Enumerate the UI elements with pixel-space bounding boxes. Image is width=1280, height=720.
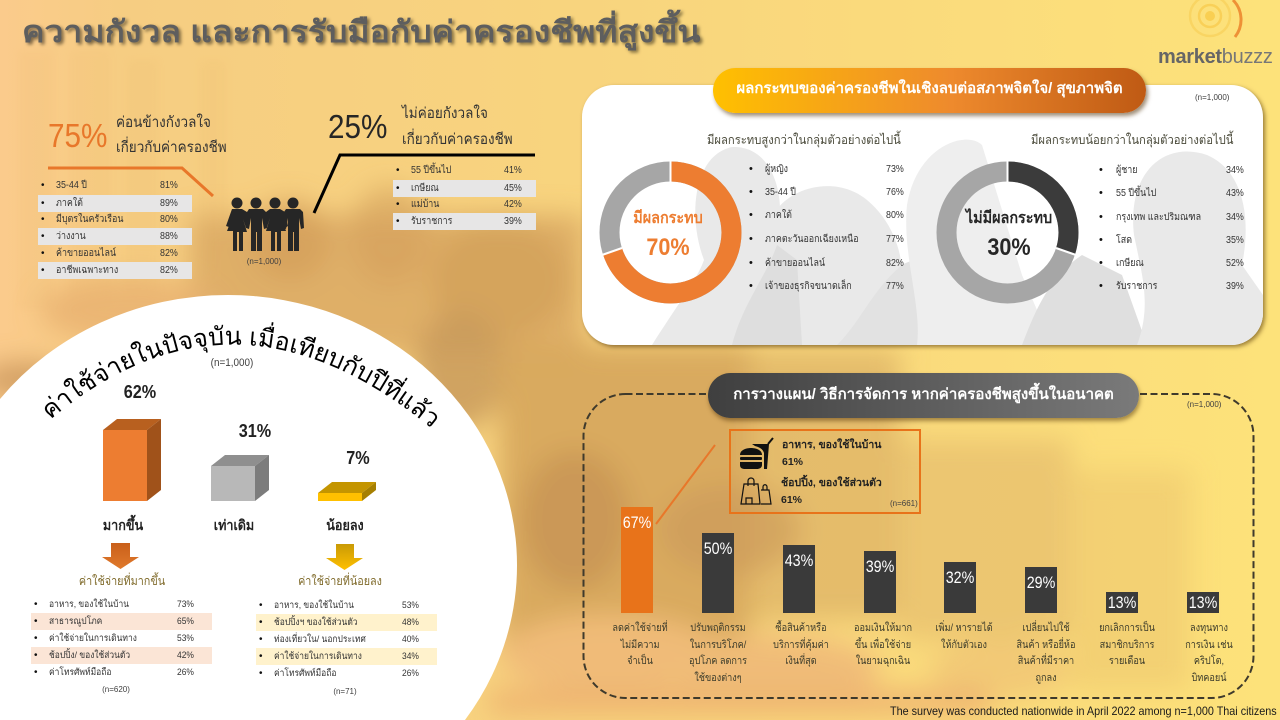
list: lower impact groups: 35% — [1226, 235, 1244, 246]
label: ลงทุนทาง — [1190, 622, 1228, 634]
list: spending down: ท่องเที่ยวใน/ นอกประเทศ — [274, 634, 366, 645]
concern stat: 75%: เกี่ยวกับค่าครองชีพ — [116, 139, 227, 156]
list: higher impact groups: • — [749, 186, 753, 198]
donut label: impacted — [633, 209, 703, 261]
list: not concerned groups: 41% — [504, 165, 522, 176]
list: concerned groups: • — [41, 180, 45, 191]
label: ให้กับตัวเอง — [941, 639, 987, 651]
list: spending up — [31, 598, 212, 678]
label — [1099, 620, 1155, 667]
list: spending up: อาหาร, ของใช้ในบ้าน — [49, 599, 129, 610]
list: higher impact groups: • — [749, 163, 753, 175]
label: บิทคอยน์ — [1191, 672, 1227, 684]
subhead: spending up: ค่าใช้จ่ายที่มากขึ้น — [79, 574, 165, 588]
list: spending down: • — [259, 651, 263, 662]
label — [689, 622, 747, 684]
bar: 43% — [783, 545, 815, 613]
label: ในยามฉุกเฉิน — [856, 655, 910, 667]
list: lower impact groups: • — [1099, 187, 1103, 199]
label: ลดค่าใช้จ่ายที่ — [612, 622, 668, 634]
panel: future coping dashed frame — [582, 393, 1254, 699]
icon: burger and drink — [740, 437, 774, 469]
donut label: impacted: มีผลกระทบ — [633, 210, 703, 227]
label: รายเดือน — [1109, 655, 1145, 667]
not concerned stat: 25% — [328, 104, 513, 148]
bar: 32%: 32% — [946, 568, 974, 587]
list: concerned groups: มีบุตรในครัวเรือน — [56, 214, 124, 225]
bar: 43%: 43% — [785, 551, 813, 570]
list: spending down: ค่าใช้จ่ายในการเดินทาง — [274, 651, 362, 662]
list: concerned groups: • — [41, 214, 45, 225]
header pill: future coping — [708, 373, 1139, 418]
bar: 29% — [1025, 567, 1057, 613]
connector: callout line — [655, 444, 716, 524]
label — [1017, 620, 1075, 684]
list: lower impact groups: 34% — [1226, 212, 1244, 223]
list: concerned groups: ว่างงาน — [56, 231, 86, 242]
label: ขึ้น เพื่อใช้จ่าย — [855, 639, 911, 651]
list: concerned groups: • — [41, 198, 45, 209]
list: spending up: 73% — [177, 599, 194, 610]
list: not concerned groups: • — [396, 199, 400, 210]
not concerned stat: 25%: เกี่ยวกับค่าครองชีพ — [402, 131, 513, 148]
list: higher impact groups: เจ้าของธุรกิจขนาดเล็ก — [765, 281, 852, 292]
list: higher impact groups: 35-44 ปี — [765, 187, 796, 198]
bar: 32% — [944, 562, 976, 613]
label: เพิ่ม/ หารายได้ — [935, 622, 993, 634]
list: not concerned groups: รับราชการ — [411, 216, 452, 227]
list: higher impact groups: ภาคใต้ — [765, 210, 792, 221]
label: คริปโต, — [1194, 655, 1224, 667]
bar: 67%: 67% — [623, 513, 651, 532]
connector: orange line — [48, 166, 214, 197]
sample size: (n=661) — [890, 499, 918, 508]
list: spending up: สาธารณูปโภค — [49, 616, 102, 627]
label: ใช้ของต่างๆ — [694, 672, 742, 684]
donut label: impacted: 70% — [646, 234, 690, 261]
concern stat: 75%: 75% — [48, 117, 107, 154]
text: food — [782, 438, 882, 468]
text: food: อาหาร, ของใช้ในบ้าน — [782, 439, 881, 451]
list: spending down: 40% — [402, 634, 419, 645]
list: not concerned groups: 42% — [504, 199, 522, 210]
sample size: (n=620) — [102, 685, 130, 694]
donut: not impacted 30% — [936, 162, 1078, 304]
list: lower impact groups: รับราชการ — [1116, 281, 1157, 292]
list: lower impact groups: กรุงเทพ และปริมณฑล — [1116, 212, 1201, 223]
value: 31%: 31% — [239, 421, 271, 441]
list: higher impact groups: ผู้หญิง — [765, 164, 788, 175]
list: not concerned groups: • — [396, 216, 400, 227]
list: concerned groups: • — [41, 248, 45, 259]
list: concerned groups: 82% — [160, 265, 178, 276]
logo: marketbuzzz: marketbuzzz — [1158, 46, 1273, 68]
bar: 13% invest: 13% — [1189, 593, 1217, 612]
concern stat: 75%: ค่อนข้างกังวลใจ — [116, 114, 211, 131]
list: not concerned groups: 39% — [504, 216, 522, 227]
label: more: มากขึ้น — [103, 517, 143, 533]
text: shopping: 61% — [781, 494, 802, 506]
sample size: (n=1,000) — [1195, 93, 1229, 102]
list: lower impact groups: • — [1099, 234, 1103, 246]
arrow: more — [102, 543, 139, 569]
footer: survey note: The survey was conducted nationwide in April 2022 among n=1,000 Thai citizens — [890, 704, 1277, 718]
silhouettes — [652, 140, 1263, 345]
list: spending down: 48% — [402, 617, 419, 628]
donut: impacted 70% — [600, 162, 742, 304]
list: not concerned groups — [393, 162, 536, 230]
value: 62%: 62% — [124, 382, 156, 402]
list: concerned groups: 81% — [160, 180, 178, 191]
label: ไม่มีความ — [620, 639, 660, 651]
header pill: future coping: การวางแผน/ วิธีการจัดการ หากค่าครองชีพสูงขึ้นในอนาคต — [733, 386, 1114, 403]
list: not concerned groups: 55 ปีขึ้นไป — [411, 165, 451, 176]
label — [935, 620, 993, 651]
list: lower impact groups: เกษียณ — [1116, 258, 1144, 269]
bar: 50% — [702, 533, 734, 613]
text: shopping: ช้อปปิ้ง, ของใช้ส่วนตัว — [781, 477, 882, 489]
list: spending down: ช้อปปิ้งฯ ของใช้ส่วนตัว — [274, 617, 358, 628]
list: spending up: • — [34, 633, 38, 644]
list: not concerned groups: • — [396, 165, 400, 176]
subhead: lower impact: มีผลกระทบน้อยกว่าในกลุ่มตัวอย่างต่อไปนี้ — [1031, 133, 1233, 147]
list: higher impact groups: • — [749, 209, 753, 221]
connector: black line — [312, 154, 535, 214]
sample size: (n=1,000) — [1187, 400, 1221, 409]
label: เปลี่ยนไปใช้ — [1022, 622, 1070, 634]
donut label: not impacted: ไม่มีผลกระทบ — [966, 210, 1052, 227]
list: lower impact groups: 43% — [1226, 188, 1244, 199]
list: higher impact groups: • — [749, 280, 753, 292]
label: สินค้า หรือยี่ห้อ — [1017, 639, 1075, 651]
list: spending up: 65% — [177, 616, 194, 627]
label — [773, 620, 829, 667]
label: ยกเลิกการเป็น — [1099, 622, 1155, 634]
title: ความกังวล และการรับมือกับค่าครองชีพที่สูงขึ้น — [22, 16, 700, 49]
list: spending up: ช้อปปิ้ง/ ของใช้ส่วนตัว — [49, 650, 130, 661]
list: lower impact groups: • — [1099, 164, 1103, 176]
list: concerned groups: อาชีพเฉพาะทาง — [56, 265, 118, 276]
text: food: 61% — [782, 456, 803, 468]
bar chart: coping plans — [612, 507, 1233, 684]
logo: marketbuzzz — [1158, 0, 1273, 68]
list: lower impact groups: 52% — [1226, 258, 1244, 269]
list: higher impact groups: • — [749, 233, 753, 245]
curved heading: spending vs last year: ค่าใช้จ่ายในปัจจุบัน เมื่อเทียบกับปีที่แล้ว — [44, 322, 438, 426]
text: shopping — [781, 474, 882, 506]
subhead: spending down: ค่าใช้จ่ายที่น้อยลง — [298, 574, 382, 588]
list: higher impact groups: 77% — [886, 234, 904, 245]
list: higher impact groups: 77% — [886, 281, 904, 292]
header pill: mental health impact — [713, 68, 1146, 113]
list: lower impact groups: • — [1099, 280, 1103, 292]
list: spending up: ค่าโทรศัพท์มือถือ — [49, 667, 111, 678]
bar: 50%: 50% — [704, 539, 732, 558]
list: spending down — [256, 600, 437, 679]
list: lower impact groups: โสด — [1116, 235, 1132, 246]
list: higher impact groups: • — [749, 257, 753, 269]
label: ปรับพฤติกรรม — [690, 622, 746, 634]
cube chart: spending change — [103, 419, 376, 501]
label: ซื้อสินค้าหรือ — [775, 622, 827, 634]
label: สมาชิกบริการ — [1100, 639, 1154, 651]
bar: 39%: 39% — [866, 557, 894, 576]
donut label: not impacted: 30% — [987, 234, 1031, 261]
cube: less — [318, 482, 376, 501]
label: ออมเงินให้มาก — [854, 622, 912, 634]
not concerned stat: 25%: 25% — [328, 108, 387, 145]
list: concerned groups: 80% — [160, 214, 178, 225]
label: same: เท่าเดิม — [214, 517, 254, 533]
list: spending down: ค่าโทรศัพท์มือถือ — [274, 668, 336, 679]
list: spending down: • — [259, 668, 263, 679]
list: spending down: อาหาร, ของใช้ในบ้าน — [274, 600, 354, 611]
header pill: mental health impact: ผลกระทบของค่าครองชีพในเชิงลบต่อสภาพจิตใจ/ สุขภาพจิต — [736, 80, 1123, 97]
list: lower impact groups — [1099, 164, 1244, 292]
list: lower impact groups: 34% — [1226, 165, 1244, 176]
list: higher impact groups — [749, 163, 904, 292]
list: lower impact groups: 55 ปีขึ้นไป — [1116, 188, 1156, 199]
label: จำเป็น — [627, 655, 653, 667]
list: concerned groups — [38, 180, 192, 279]
list: lower impact groups: 39% — [1226, 281, 1244, 292]
list: concerned groups: 35-44 ปี — [56, 180, 87, 191]
list: concerned groups: • — [41, 265, 45, 276]
list: spending up: • — [34, 667, 38, 678]
list: lower impact groups: • — [1099, 211, 1103, 223]
bar: 13% subscription: 13% — [1108, 593, 1136, 612]
white circle backing — [0, 295, 517, 720]
label: บริการที่คุ้มค่า — [773, 639, 829, 651]
label: การเงิน เช่น — [1185, 639, 1233, 651]
sample size: (n=71) — [333, 687, 357, 696]
list: spending down: 26% — [402, 668, 419, 679]
concern stat: 75% — [48, 114, 227, 156]
bar: 67% — [621, 507, 653, 613]
list: spending up: ค่าใช้จ่ายในการเดินทาง — [49, 633, 137, 644]
list: higher impact groups: 80% — [886, 210, 904, 221]
list: spending down: 53% — [402, 600, 419, 611]
list: spending up: • — [34, 616, 38, 627]
list: spending down: • — [259, 634, 263, 645]
list: higher impact groups: 82% — [886, 258, 904, 269]
list: not concerned groups: 45% — [504, 183, 522, 194]
label: less: น้อยลง — [326, 517, 364, 533]
list: spending up: • — [34, 599, 38, 610]
list: concerned groups: 82% — [160, 248, 178, 259]
cube: more — [103, 419, 161, 501]
label — [854, 622, 912, 667]
list: concerned groups: ค้าขายออนไลน์ — [56, 248, 116, 259]
list: not concerned groups: เกษียณ — [411, 183, 439, 194]
sample size: (n=1,000) — [247, 257, 281, 266]
label — [1185, 622, 1233, 684]
subhead: higher impact: มีผลกระทบสูงกว่าในกลุ่มตัวอย่างต่อไปนี้ — [707, 133, 901, 147]
label: เงินที่สุด — [785, 655, 817, 667]
list: concerned groups: ภาคใต้ — [56, 198, 83, 209]
list: higher impact groups: ค้าขายออนไลน์ — [765, 258, 825, 269]
list: spending up: 53% — [177, 633, 194, 644]
label: ในการบริโภค/ — [690, 639, 746, 651]
label: อุปโภค ลดการ — [689, 655, 747, 667]
list: spending up: 26% — [177, 667, 194, 678]
list: concerned groups: 89% — [160, 198, 178, 209]
list: spending down: 34% — [402, 651, 419, 662]
donut label: not impacted — [964, 208, 1052, 261]
list: higher impact groups: 73% — [886, 164, 904, 175]
list: not concerned groups: แม่บ้าน — [411, 199, 439, 210]
list: higher impact groups: ภาคตะวันออกเฉียงเหนือ — [765, 234, 859, 245]
bar: 39% — [864, 551, 896, 613]
list: concerned groups: • — [41, 231, 45, 242]
not concerned stat: 25%: ไม่ค่อยกังวลใจ — [402, 105, 488, 122]
list: spending down: • — [259, 617, 263, 628]
list: concerned groups: 88% — [160, 231, 178, 242]
sample size: (n=1,000) — [211, 357, 253, 369]
list: spending down: • — [259, 600, 263, 611]
list: spending up: • — [34, 650, 38, 661]
label: ถูกลง — [1035, 672, 1057, 684]
arrow: less — [326, 544, 363, 570]
bar: 29%: 29% — [1027, 573, 1055, 592]
list: lower impact groups: • — [1099, 257, 1103, 269]
panel: mental health impact — [582, 85, 1263, 345]
label: สินค้าที่มีราคา — [1018, 655, 1074, 667]
icon: shopping bags — [740, 477, 772, 505]
list: spending up: 42% — [177, 650, 194, 661]
callout: top cost-cut categories — [729, 429, 921, 514]
list: lower impact groups: ผู้ชาย — [1116, 165, 1137, 176]
label — [612, 620, 668, 667]
list: not concerned groups: • — [396, 183, 400, 194]
cube: same — [211, 455, 269, 501]
value: 7%: 7% — [346, 448, 370, 468]
list: higher impact groups: 76% — [886, 187, 904, 198]
icon: group of people — [226, 198, 304, 251]
